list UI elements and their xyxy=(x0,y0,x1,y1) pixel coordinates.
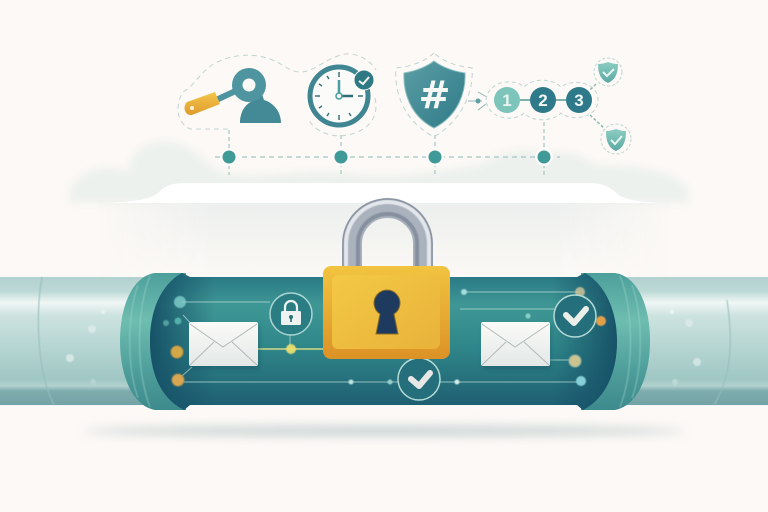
numbered steps: 1 xyxy=(502,91,512,110)
keyhole xyxy=(374,290,400,334)
pipe interior xyxy=(170,277,600,405)
ground shadow xyxy=(84,426,684,436)
icon: clock xyxy=(308,67,376,136)
right collar xyxy=(552,273,650,410)
fog below white band xyxy=(163,203,605,240)
numbered steps: 3 xyxy=(574,91,584,110)
numbered steps: 2 xyxy=(538,91,548,110)
pipe left segment xyxy=(0,277,165,405)
icon: upper mini shield xyxy=(590,58,622,90)
numbered steps xyxy=(468,80,598,120)
icon: lower mini shield xyxy=(590,115,631,154)
icon: hash shield xyxy=(396,53,472,137)
circuit nodes xyxy=(163,287,606,386)
left collar xyxy=(120,273,215,410)
left envelope xyxy=(189,322,260,370)
right envelope xyxy=(481,322,552,370)
connector timeline xyxy=(215,122,560,175)
padlock xyxy=(323,199,450,359)
circuit lines xyxy=(180,292,580,382)
pipe right segment xyxy=(605,277,768,405)
shackle xyxy=(343,199,432,270)
white band xyxy=(103,183,660,203)
lock body xyxy=(323,266,450,359)
icon: key and user xyxy=(178,54,376,129)
cloud backdrop xyxy=(69,141,690,203)
bottom check badge xyxy=(398,358,440,400)
right check badge xyxy=(554,295,596,337)
small lock icon xyxy=(270,293,312,335)
icon: hash shield: # xyxy=(419,73,450,117)
